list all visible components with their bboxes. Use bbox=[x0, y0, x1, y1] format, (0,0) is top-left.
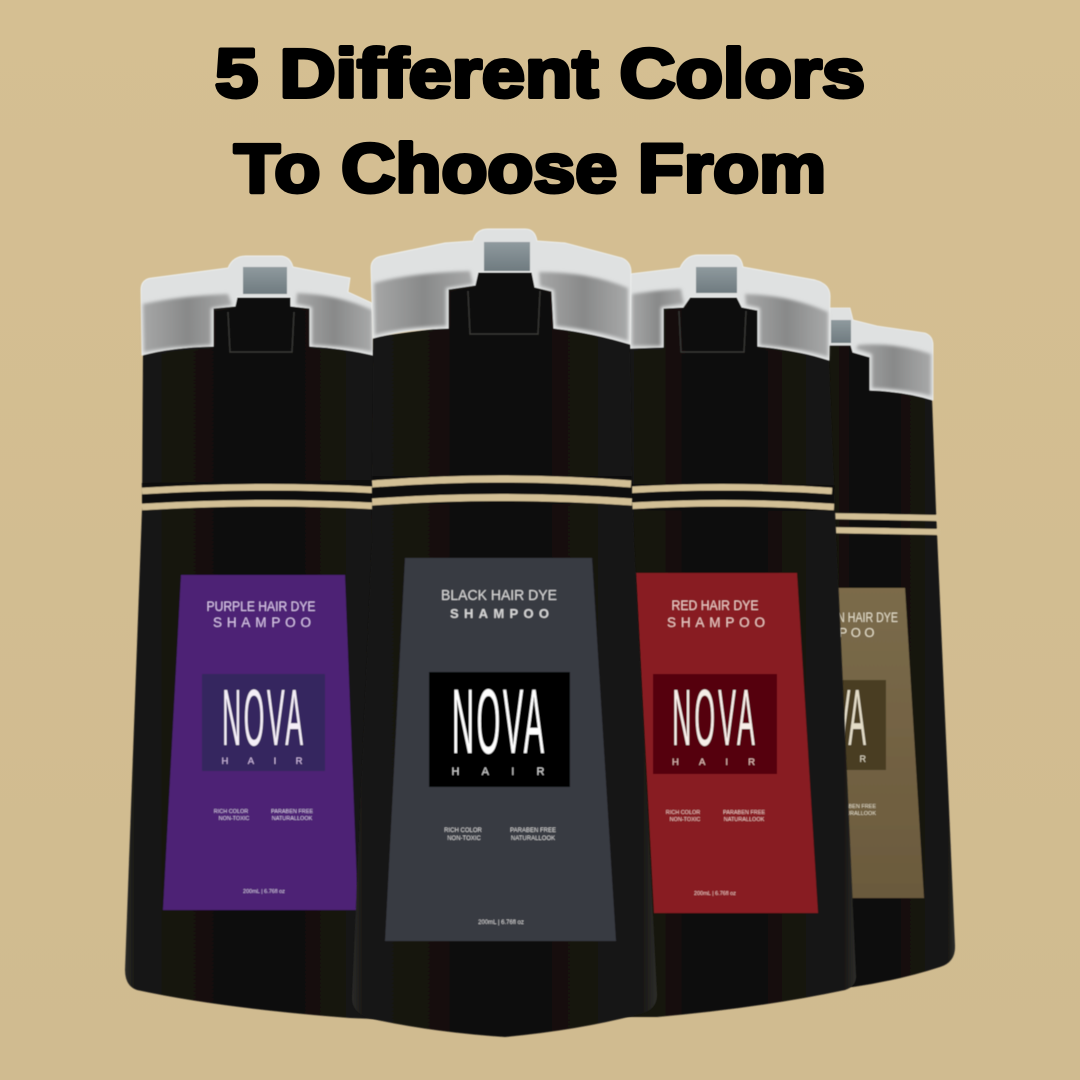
purple tower detail bbox=[228, 312, 294, 352]
purple bottle body bbox=[125, 297, 400, 1020]
red label text: RED HAIR DYE bbox=[672, 598, 758, 613]
black label text: 200mL | 6.76fl oz bbox=[478, 920, 524, 926]
brown label text: BROWN HAIR DYE bbox=[804, 610, 898, 625]
brown bottle cap bbox=[825, 308, 933, 400]
bottle: brown hair dye (back) bbox=[787, 308, 955, 987]
purple label text: NATURALLOOK bbox=[272, 816, 313, 822]
purple label text bbox=[206, 598, 316, 895]
red bottle cap bbox=[630, 255, 830, 360]
title: To Choose From bbox=[234, 130, 826, 207]
brown label text: NATURALLOOK bbox=[835, 811, 876, 817]
title: 5 Different Colors bbox=[215, 35, 865, 112]
red label text: 200mL | 6.76fl oz bbox=[694, 891, 736, 897]
black label text: RICH COLOR bbox=[444, 828, 483, 834]
red label text: SHAMPOO bbox=[667, 615, 765, 630]
brown cap window bbox=[831, 320, 851, 343]
purple cap shade bbox=[143, 293, 372, 352]
black bottle bands bbox=[372, 479, 632, 502]
brown logo box bbox=[820, 680, 886, 770]
red bottle body bbox=[600, 297, 856, 1017]
brown label text: SHAMPOO bbox=[787, 625, 878, 640]
purple bottle cap bbox=[141, 256, 373, 355]
purple label text: NOVA bbox=[222, 672, 303, 762]
black label text: NON-TOXIC bbox=[447, 836, 481, 842]
black logo box bbox=[429, 672, 570, 787]
black label text: NOVA bbox=[452, 670, 544, 773]
red cap window bbox=[696, 267, 737, 293]
black label text: NATURALLOOK bbox=[511, 836, 555, 842]
red label text: HAIR bbox=[672, 757, 755, 768]
brown label text bbox=[787, 610, 898, 817]
black cap shade bbox=[374, 271, 628, 341]
brown cap shade bbox=[856, 344, 931, 396]
red label bbox=[636, 573, 818, 913]
title bbox=[215, 35, 865, 207]
purple cap window bbox=[243, 267, 287, 294]
purple label text: PURPLE HAIR DYE bbox=[206, 598, 316, 614]
red label text: NOVA bbox=[672, 672, 755, 762]
black label text: BLACK HAIR DYE bbox=[441, 588, 557, 604]
purple label text: HAIR bbox=[222, 756, 303, 767]
black label text: SHAMPOO bbox=[450, 606, 549, 621]
bottle: red hair dye bbox=[600, 255, 856, 1017]
black bottle cap bbox=[371, 229, 631, 344]
red label text: NATURALLOOK bbox=[724, 817, 765, 823]
red label text: NON-TOXIC bbox=[670, 817, 700, 823]
black label bbox=[385, 558, 616, 941]
brown label text: R bbox=[860, 754, 866, 764]
purple label text: PARABEN FREE bbox=[271, 809, 313, 815]
black label text: HAIR bbox=[452, 766, 545, 778]
black label text bbox=[441, 588, 557, 926]
purple label bbox=[163, 575, 358, 910]
black label text: PARABEN FREE bbox=[510, 828, 556, 834]
purple label text: SHAMPOO bbox=[213, 615, 311, 630]
red logo box bbox=[653, 674, 777, 774]
bottle: purple hair dye bbox=[125, 256, 400, 1020]
red bottle bands bbox=[628, 487, 834, 507]
brown label text: NOVA bbox=[793, 672, 866, 762]
red label text: PARABEN FREE bbox=[723, 810, 765, 816]
black bottle body bbox=[352, 272, 657, 1037]
purple bottle bands bbox=[142, 487, 375, 507]
purple label text: NON-TOXIC bbox=[219, 816, 249, 822]
black cap window bbox=[484, 242, 530, 271]
red cap shade bbox=[632, 289, 828, 357]
brown label text: PARABEN FREE bbox=[834, 804, 876, 810]
brown bottle bands bbox=[825, 516, 940, 532]
red tower detail bbox=[679, 311, 746, 352]
red label text bbox=[666, 598, 765, 897]
brown bottle body bbox=[800, 345, 955, 987]
purple label text: 200mL | 6.76fl oz bbox=[243, 889, 285, 895]
purple logo box bbox=[202, 674, 325, 771]
bottle: black hair dye (front) bbox=[352, 229, 657, 1037]
brown label bbox=[820, 588, 924, 898]
black tower detail bbox=[468, 291, 540, 334]
red label text: RICH COLOR bbox=[666, 810, 700, 816]
purple label text: RICH COLOR bbox=[214, 809, 248, 815]
